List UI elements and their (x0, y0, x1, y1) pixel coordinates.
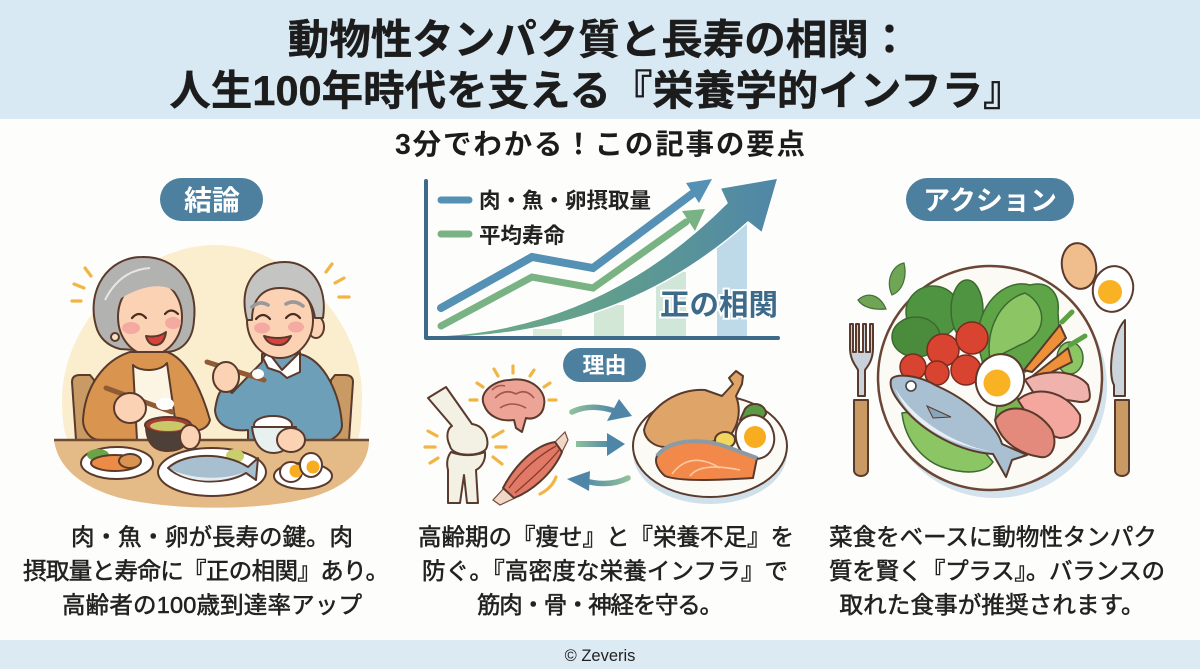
miso bowl (145, 417, 200, 451)
subtitle: 3分でわかる！この記事の要点 (395, 129, 805, 161)
conclusion text (23, 524, 389, 618)
tomatoes (900, 322, 988, 385)
fish plate (158, 448, 266, 496)
panel: conclusion (23, 178, 389, 618)
title (169, 16, 1025, 114)
line: meat fish egg intake (441, 179, 712, 308)
copyright: © Zeveris (565, 647, 635, 665)
illustration: elderly couple eating (54, 245, 369, 508)
panel: reason (418, 348, 794, 618)
sparkle rays (72, 264, 349, 301)
reason text: 防ぐ。『高密度な栄養インフラ』で (422, 558, 788, 584)
badge: action: アクション (923, 186, 1057, 216)
big arrow (426, 178, 778, 338)
icon: eggs (1058, 240, 1138, 316)
carrots (1024, 312, 1085, 378)
meats (995, 372, 1090, 457)
axes (426, 181, 778, 338)
title: 動物性タンパク質と長寿の相関： (288, 16, 910, 63)
salmon plate (81, 447, 153, 479)
action text: 質を賢く『プラス』。バランスの (829, 558, 1165, 584)
footer band (0, 640, 1200, 669)
icon: brain (470, 366, 556, 432)
conclusion text: 高齢者の100歳到達率アップ (62, 592, 362, 618)
icon: muscle (493, 432, 568, 505)
panel: correlation chart (426, 178, 778, 338)
conclusion text: 摂取量と寿命に『正の相関』あり。 (23, 558, 389, 584)
arrows (567, 399, 632, 491)
fish (891, 376, 1027, 477)
panel: action (829, 178, 1165, 618)
reason text (418, 524, 794, 618)
icon: knee joint (425, 387, 506, 503)
legend: 肉・魚・卵摂取量 (479, 189, 651, 213)
chart label: 正の相関 (660, 289, 778, 322)
action text: 取れた食事が推奨されます。 (840, 592, 1144, 618)
action text: 菜食をベースに動物性タンパク (829, 524, 1157, 550)
badge: reason (563, 348, 646, 382)
title: 人生100年時代を支える『栄養学的インフラ』 (169, 67, 1025, 114)
action text (829, 524, 1165, 618)
badge: conclusion: 結論 (184, 185, 240, 216)
icon: knife (1111, 320, 1129, 476)
reason text: 筋肉・骨・神経を守る。 (477, 592, 723, 618)
plate (878, 266, 1107, 498)
conclusion text: 肉・魚・卵が長寿の鍵。肉 (71, 524, 353, 550)
legend: 平均寿命 (479, 224, 566, 248)
rice bowl (252, 416, 305, 453)
food plate (633, 371, 787, 504)
chairs (72, 375, 353, 440)
woman (83, 257, 210, 440)
table (54, 440, 369, 508)
header band (0, 0, 1200, 119)
icon: fork (850, 324, 873, 476)
badge: action (906, 178, 1074, 221)
icon: leaves (858, 263, 905, 309)
bars (533, 223, 747, 338)
man (207, 262, 342, 447)
egg plate (274, 453, 332, 489)
sliced egg (970, 349, 1030, 411)
salad greens (892, 280, 1083, 472)
reason text: 高齢期の『痩せ』と『栄養不足』を (418, 524, 794, 550)
badge: conclusion (160, 178, 263, 221)
legend (441, 189, 651, 248)
badge: reason: 理由 (582, 353, 627, 378)
line: life expectancy (441, 209, 705, 326)
